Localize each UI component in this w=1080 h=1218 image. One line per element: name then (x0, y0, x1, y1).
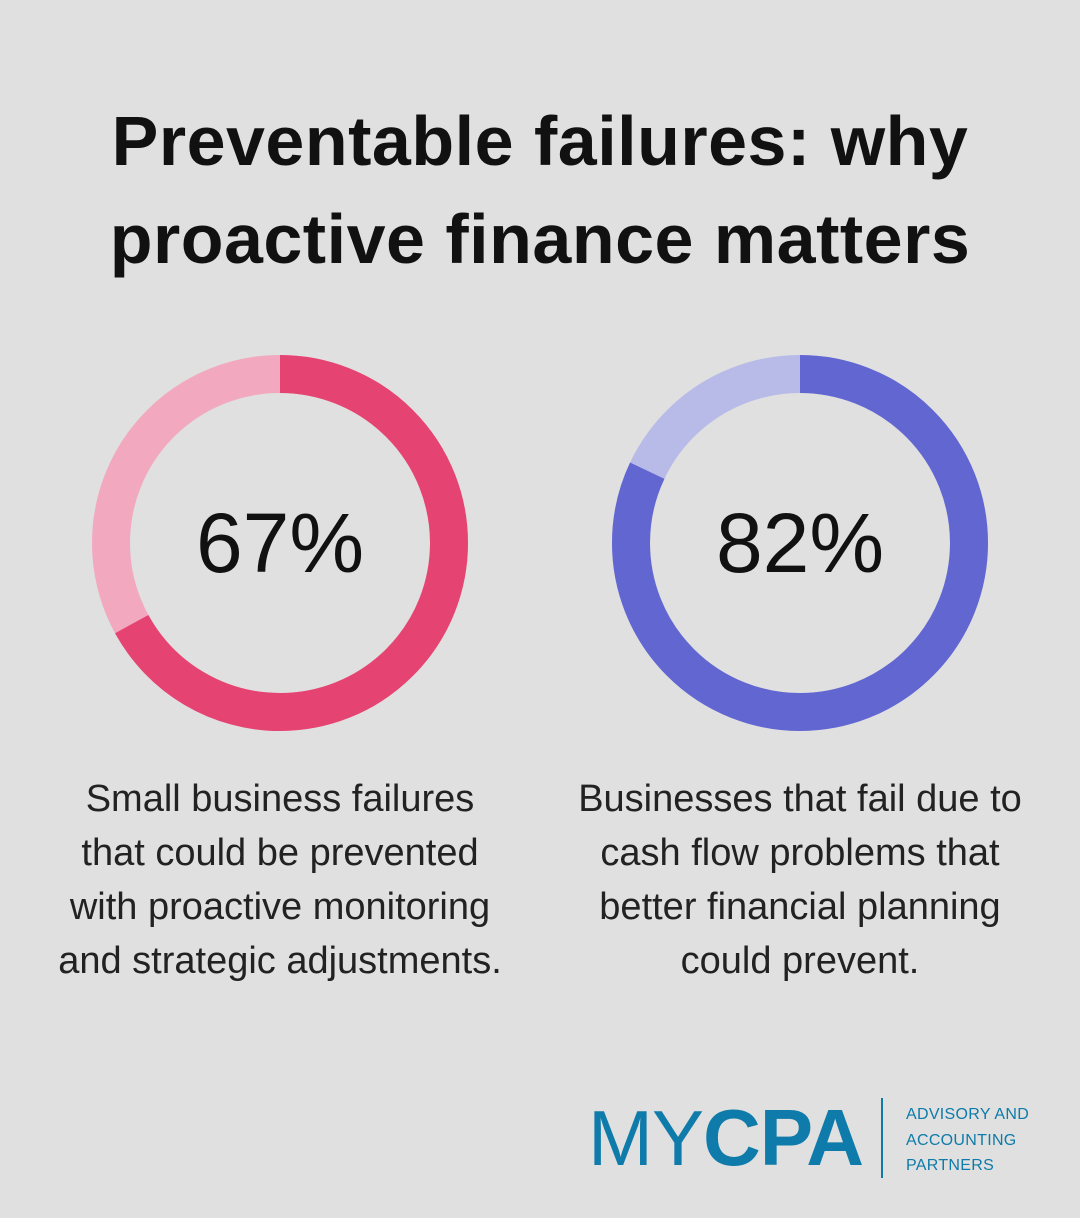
description: right (578, 778, 1022, 982)
title (110, 102, 970, 278)
description: right: better financial planning (599, 886, 1001, 928)
description: left (58, 778, 502, 982)
donut chart: 67% (92, 355, 468, 731)
stat: 67%: 67% (196, 496, 364, 590)
description: left: Small business failures (86, 778, 474, 820)
description: right: cash flow problems that (600, 832, 1000, 874)
stat: 82%: 82% (716, 496, 884, 590)
description: right: could prevent. (681, 940, 919, 982)
donut chart: 82% (612, 355, 988, 731)
title: Preventable failures: why (112, 102, 968, 180)
logo (588, 1093, 1029, 1182)
description: right: Businesses that fail due to (578, 778, 1022, 820)
title: proactive finance matters (110, 200, 970, 278)
logo: ACCOUNTING (906, 1132, 1017, 1148)
logo: ADVISORY AND (906, 1106, 1029, 1123)
description: left: and strategic adjustments. (58, 940, 502, 982)
logo: PARTNERS (906, 1157, 994, 1174)
logo: MYCPA (588, 1093, 863, 1182)
description: left: with proactive monitoring (70, 886, 490, 928)
description: left: that could be prevented (81, 832, 479, 874)
